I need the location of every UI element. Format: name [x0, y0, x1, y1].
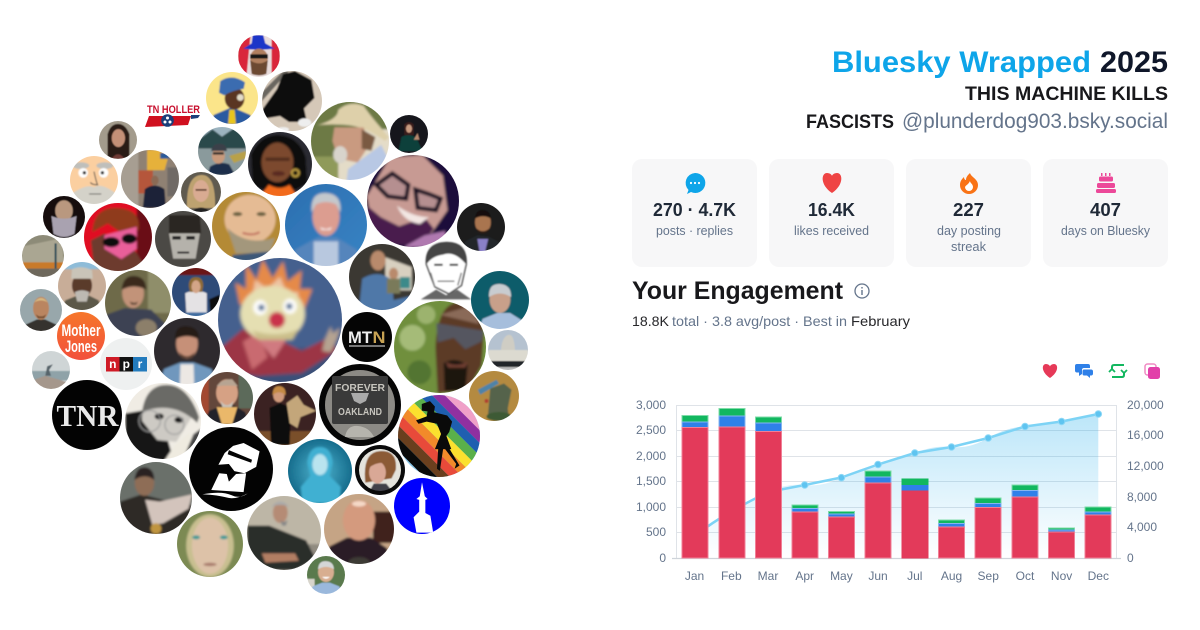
panel: avatar bubble cluster [16, 31, 538, 598]
avatar: green-tinted woman [170, 504, 250, 584]
avatar: cartoon man on yellow [206, 72, 258, 124]
panel: posting streak: streak [951, 239, 986, 254]
avatar: blonde woman [181, 172, 221, 212]
left axis labels: 1,000 [636, 500, 666, 514]
engagement summary: 18.8K [632, 313, 670, 329]
icon: cake [1096, 173, 1116, 193]
logo: Mother Jones: Jones [65, 337, 97, 356]
avatar: cartoon old man [70, 156, 118, 204]
avatar: dark monster portrait [155, 211, 211, 267]
left axis labels: 500 [646, 525, 666, 539]
avatar: rainbow silhouette [398, 395, 480, 477]
avatar: man in blue blazer [154, 318, 220, 384]
panel: posting streak: day posting [937, 223, 1001, 238]
avatar: large heat miser puppet [218, 258, 342, 382]
logo: TNR [52, 380, 122, 450]
left axis labels [636, 398, 666, 565]
cumulative area and line [694, 411, 1102, 558]
right axis labels: 8,000 [1127, 490, 1157, 504]
title: 2025 [1100, 46, 1168, 79]
avatar: woman in theater seat [172, 268, 220, 316]
icon: chat bubble [686, 173, 705, 194]
month labels: Jun [868, 569, 888, 583]
month labels: Oct [1016, 569, 1035, 583]
panel: posting streak [906, 159, 1031, 267]
logo: Mother Jones [57, 312, 105, 360]
avatar: red glasses person [84, 203, 152, 271]
logo: MTN: N [372, 328, 386, 347]
month labels: Jul [907, 569, 922, 583]
display name and handle: @plunderdog903.bsky.social [902, 110, 1168, 133]
icon: likes legend [1043, 364, 1057, 378]
right axis labels: 12,000 [1127, 459, 1164, 473]
right axis labels [1127, 398, 1164, 565]
avatar: Forever Oakland: OAKLAND [338, 407, 382, 418]
heading: Your Engagement: Your Engagement [632, 277, 844, 305]
avatar: cowboy hat man [311, 102, 389, 180]
display name line one: THIS MACHINE KILLS [965, 84, 1168, 105]
stacked bars [682, 408, 1111, 558]
avatar: dark hair woman [99, 121, 137, 159]
avatar: pencil sketch man [421, 243, 471, 299]
icon: info [855, 284, 869, 298]
avatar: bearded man [43, 196, 85, 238]
month labels: Dec [1088, 569, 1109, 583]
avatar: black dog [262, 71, 322, 131]
month labels: May [830, 569, 853, 583]
logo: MTN [342, 312, 392, 362]
logo: NPR [100, 338, 152, 390]
avatar: capitol building [488, 330, 528, 370]
avatar: smiling older man [303, 552, 349, 598]
logo: NPR: p [123, 357, 130, 371]
month labels: Aug [941, 569, 962, 583]
avatar: bald man black shirt [20, 289, 62, 331]
panel: days on Bluesky: days on Bluesky [1061, 223, 1150, 238]
left axis labels: 1,500 [636, 474, 666, 488]
avatar: sea and rock [32, 351, 70, 389]
icon: heart [823, 173, 841, 193]
panel: likes received [769, 159, 894, 267]
month labels: Jan [685, 569, 704, 583]
avatar: miniature figurine [469, 371, 519, 421]
left axis labels: 2,000 [636, 449, 666, 463]
avatar: blue hooded figure [288, 439, 352, 503]
avatar: man with blanket [120, 462, 192, 534]
engagement summary: total · 3.8 avg/post · Best in [672, 313, 847, 329]
avatar: woman with plush dog [254, 383, 316, 445]
logo: NPR: n [109, 357, 116, 371]
avatar: Forever Oakland [319, 364, 401, 446]
panel: likes received: 16.4K [808, 200, 855, 220]
avatar: man with mountains [198, 127, 246, 175]
month labels [685, 569, 1109, 583]
avatar: blonde scarf woman [212, 192, 280, 260]
panel: posts and replies: posts · replies [656, 223, 733, 238]
avatar: bald man with microphone [317, 487, 401, 571]
avatar: building [22, 235, 64, 277]
logo: MTN: MT [348, 328, 373, 347]
month labels: Mar [758, 569, 778, 583]
legend icons [1043, 364, 1160, 379]
engagement summary [632, 313, 910, 329]
avatar: man in dark suit [457, 203, 505, 251]
month labels: Apr [795, 569, 814, 583]
right axis labels: 4,000 [1127, 520, 1157, 534]
logo: TNR: TNR [56, 398, 119, 433]
avatar: bearded man with shaggy dog [240, 489, 328, 577]
logo: TN Holler [145, 104, 200, 127]
panel: days on Bluesky: 407 [1090, 200, 1121, 220]
avatar: helicopter crew [349, 244, 415, 310]
avatar: flag hat man [238, 35, 280, 77]
avatar: gray-haired man on blue [285, 184, 367, 266]
avatar: curly man with cat [105, 270, 171, 336]
month labels: Sep [978, 569, 999, 583]
avatar: man with yellow shirt [201, 372, 253, 424]
right axis labels: 16,000 [1127, 428, 1164, 442]
logo: blue torch hand [394, 478, 450, 534]
panel: days on Bluesky [1043, 159, 1168, 267]
panel: likes received: likes received [794, 223, 869, 238]
month labels: Nov [1051, 569, 1072, 583]
panel: posts and replies [632, 159, 757, 267]
panel: posting streak: 227 [953, 200, 984, 220]
logo: TN Holler: TN HOLLER [147, 104, 200, 116]
icon: flame [960, 173, 978, 194]
title: Bluesky Wrapped [832, 46, 1091, 79]
icon: reposts legend [1109, 365, 1127, 377]
right axis labels: 20,000 [1127, 398, 1164, 412]
avatar: street scene [121, 150, 179, 208]
avatar: man on teal [471, 271, 529, 329]
avatar: woman in beanie and glasses [125, 383, 201, 459]
left axis labels: 2,500 [636, 423, 666, 437]
right axis labels: 0 [1127, 551, 1134, 565]
engagement summary: February [851, 313, 910, 329]
avatar: woman in orange [248, 132, 312, 196]
logo: NPR: r [138, 357, 143, 371]
month labels: Feb [721, 569, 742, 583]
avatar: sunglasses man [394, 301, 486, 393]
panel: posts and replies: 270 · 4.7K [653, 200, 736, 220]
avatar: Forever Oakland: FOREVER [335, 383, 386, 394]
icon: replies legend [1075, 364, 1093, 378]
icon: quotes legend [1145, 364, 1160, 379]
logo: Mother Jones: Mother [62, 322, 101, 340]
chart: engagement by month [636, 398, 1164, 583]
display name and handle: FASCISTS [806, 112, 894, 133]
avatar: small dark woman [390, 115, 428, 153]
left axis labels: 0 [659, 551, 666, 565]
logo: ship [189, 427, 273, 511]
left axis labels: 3,000 [636, 398, 666, 412]
avatar: brown-haired woman in black ring [355, 445, 405, 495]
avatar: man in cap [58, 262, 106, 310]
avatar: man in purple glasses [367, 155, 459, 247]
